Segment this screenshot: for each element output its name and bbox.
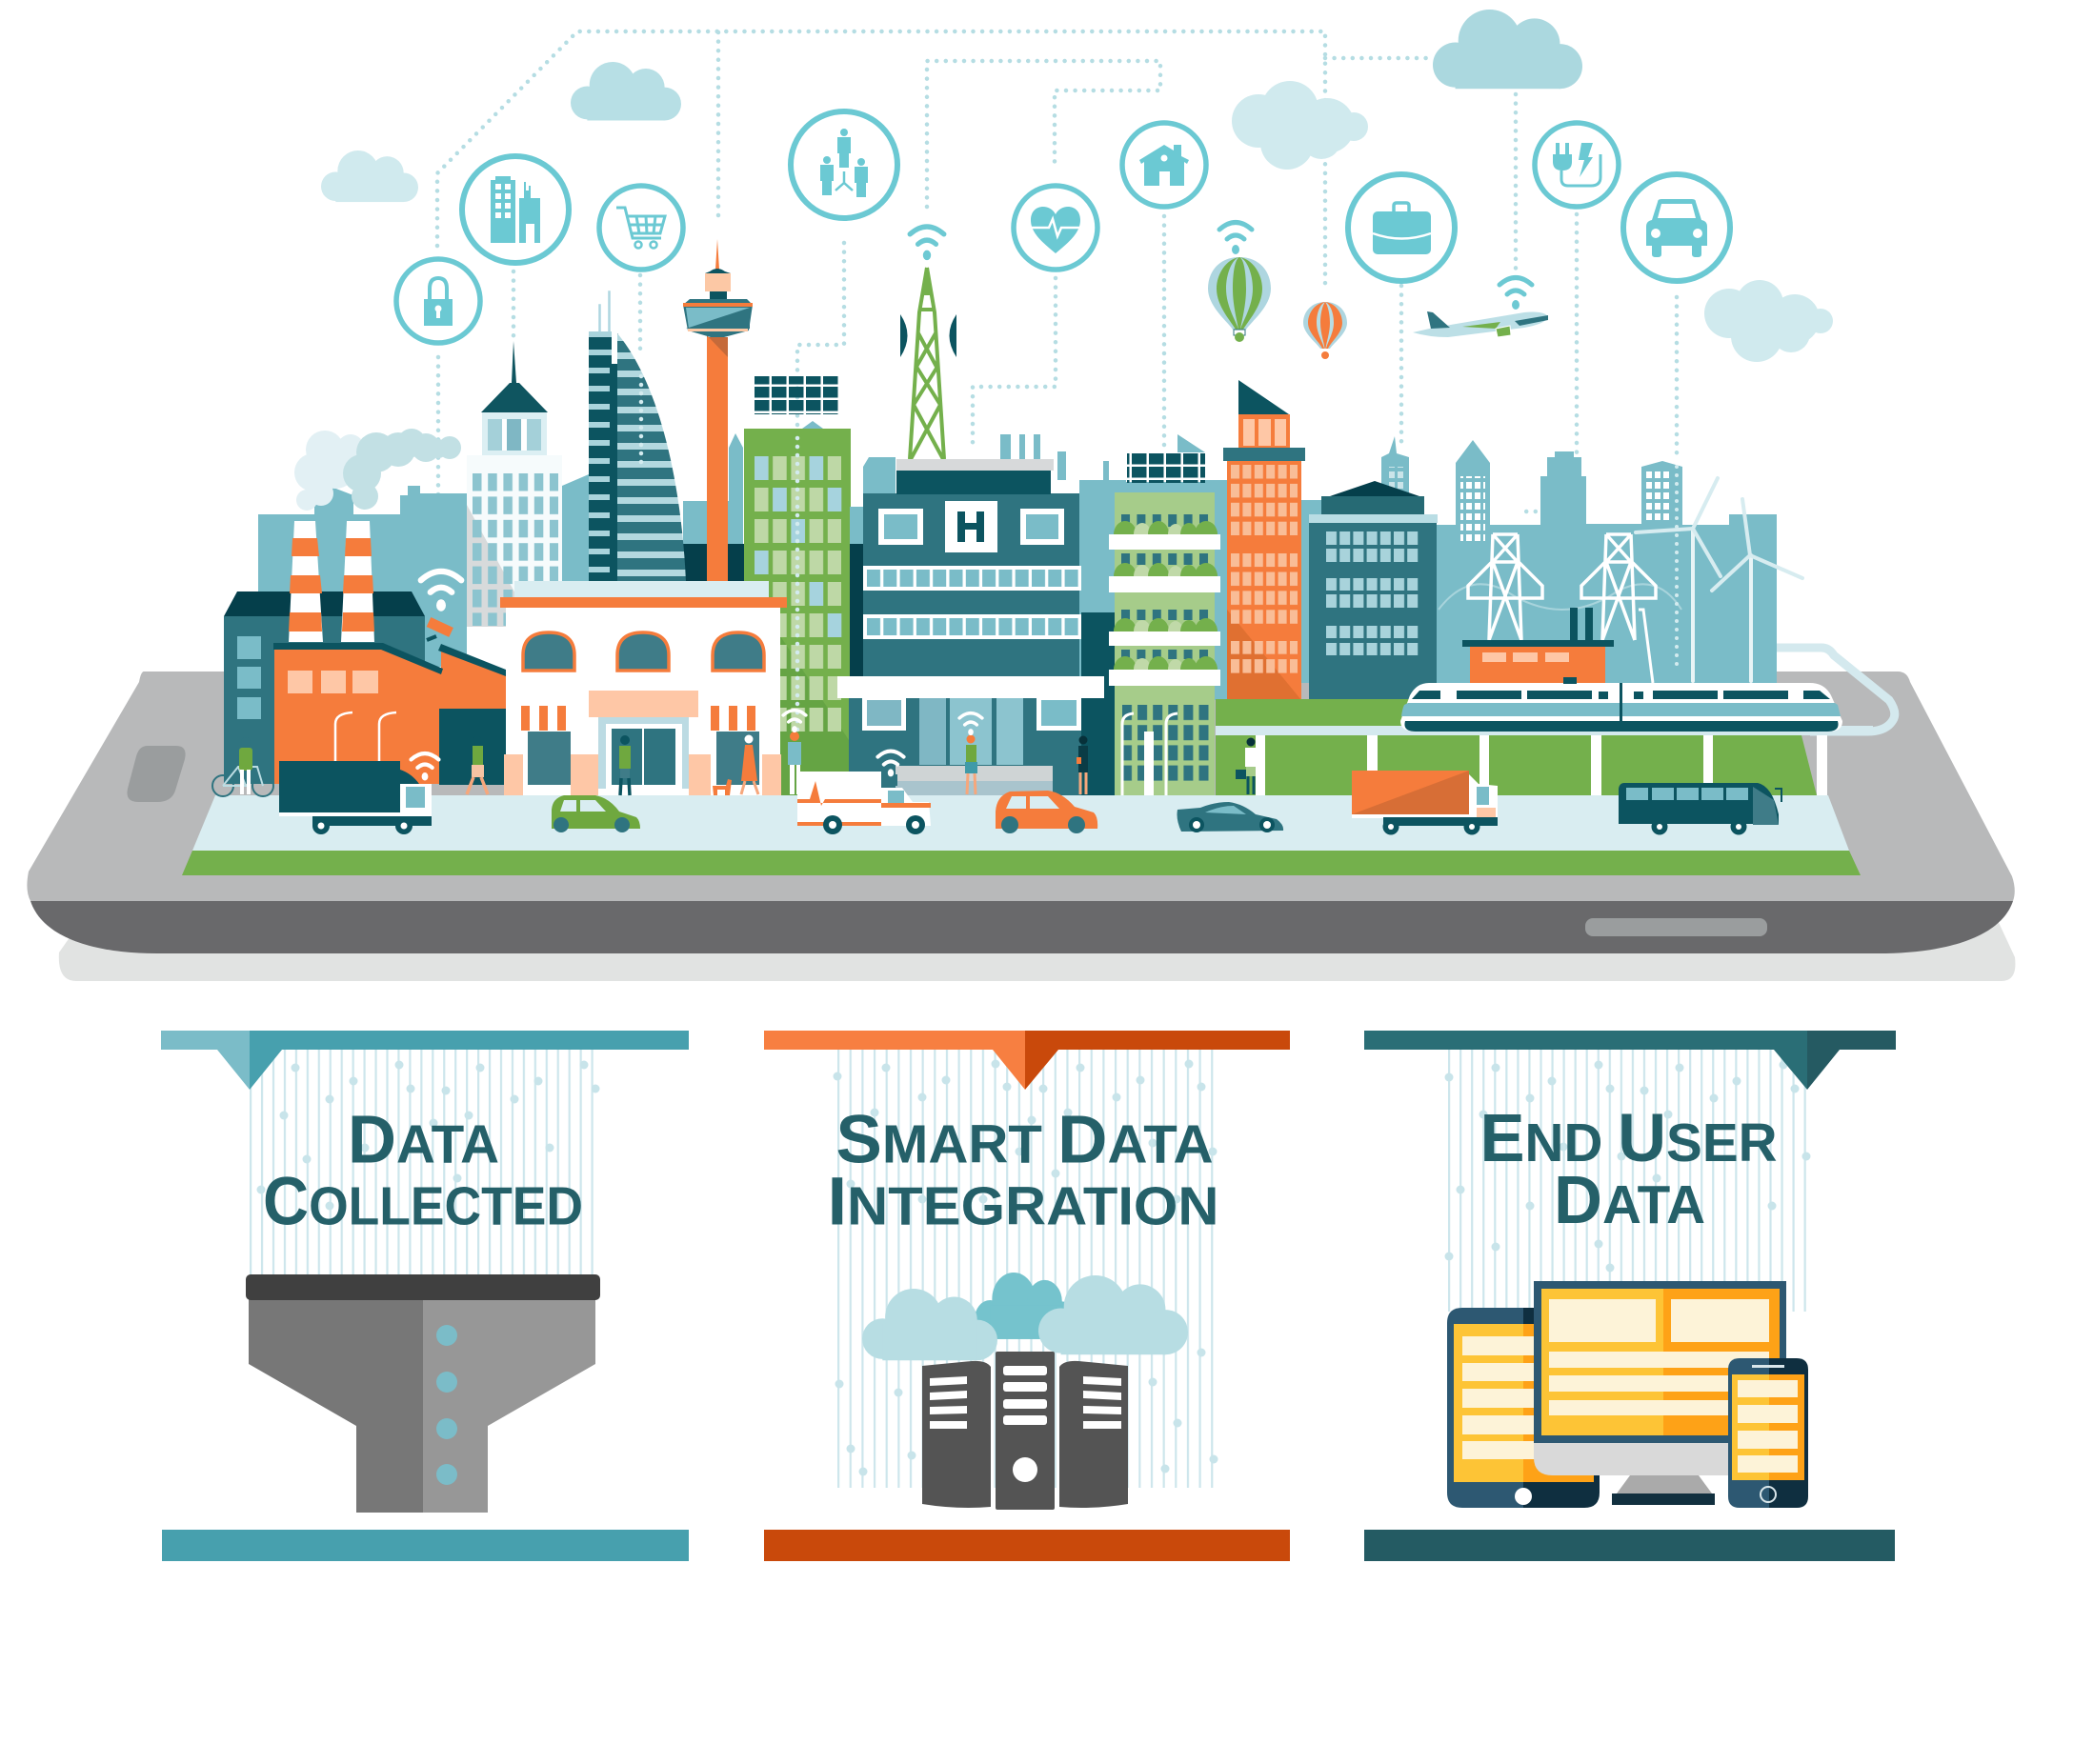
pedestrian dark dress <box>1077 735 1088 794</box>
hospital canopy <box>837 676 1104 698</box>
icon circle: shopping cart <box>599 186 683 270</box>
cloud large top right <box>1433 10 1582 89</box>
white tower <box>467 341 562 627</box>
wifi over factory <box>421 571 461 611</box>
delivery truck teal <box>279 761 432 834</box>
green verge <box>182 851 1861 875</box>
footer bar <box>764 1530 1290 1561</box>
wind turbine left <box>1636 478 1721 681</box>
server left <box>922 1361 991 1508</box>
heading: end user data: DATA <box>1554 1163 1705 1238</box>
data rain dots <box>257 1061 600 1210</box>
tablet device <box>27 672 2015 953</box>
wifi over pedestrian <box>783 711 806 732</box>
sail skyscraper <box>589 291 686 582</box>
ambulance <box>797 772 931 834</box>
pedestrian green and striped <box>467 735 488 794</box>
balcony building <box>1109 492 1220 795</box>
shop peach bases <box>504 754 781 795</box>
wifi over truck <box>412 753 438 781</box>
monitor stand <box>1612 1475 1715 1505</box>
icon circle: plug and power <box>1535 123 1619 207</box>
pedestrian with briefcase <box>1236 737 1257 794</box>
orange car <box>996 791 1097 833</box>
dark column left of hospital <box>850 544 863 677</box>
tablet side edge <box>30 901 2013 953</box>
skyline behind hospital <box>850 451 1229 700</box>
smoke plumes <box>294 429 461 511</box>
city illustration <box>182 239 1895 875</box>
server centre <box>996 1352 1055 1510</box>
heading: smart data integration <box>827 1103 1219 1240</box>
airplane <box>1413 311 1548 337</box>
track loop <box>1777 648 1895 732</box>
observation tower <box>683 239 753 582</box>
lawn under track with pillars <box>1216 735 1827 795</box>
green building <box>744 421 851 795</box>
tablet device <box>1447 1308 1600 1508</box>
bus <box>1619 783 1781 834</box>
elevated track <box>1216 726 1873 735</box>
skyline tower windows <box>1386 467 1670 545</box>
panel: data collected <box>161 1031 689 1561</box>
header bar with pointer <box>161 1031 689 1090</box>
left cloud <box>862 1289 997 1360</box>
pedestrian with dog <box>713 735 758 795</box>
train <box>1400 677 1842 732</box>
heading: end user data <box>1480 1101 1778 1238</box>
panel: smart data integration <box>764 1031 1290 1561</box>
hospital window strips <box>863 566 1081 639</box>
header bar with pointer <box>1364 1031 1896 1090</box>
solar panel on balcony building <box>1126 434 1205 483</box>
panel: end user data <box>1364 1031 1896 1561</box>
hospital entrance <box>862 698 1081 795</box>
shop arched windows <box>523 632 764 671</box>
small orange plant <box>1462 608 1614 684</box>
delivery truck orange <box>1352 771 1498 834</box>
security camera <box>427 617 453 640</box>
power pylon right <box>1581 534 1656 683</box>
pedestrian blue top <box>788 732 801 794</box>
icon: cloud servers <box>862 1273 1188 1510</box>
dark base behind towers <box>683 544 744 582</box>
orange factory <box>273 643 506 785</box>
orange tower <box>1223 380 1305 700</box>
cloud round right <box>1704 280 1833 362</box>
dotted network lines <box>437 31 1677 543</box>
street lamps <box>1122 713 1177 795</box>
footer bar <box>1364 1530 1895 1561</box>
smokestacks <box>289 521 374 642</box>
transmission mast <box>900 268 956 459</box>
wifi above plane <box>1499 278 1532 310</box>
header bar with pointer <box>764 1031 1290 1090</box>
shop sign <box>589 691 698 717</box>
shop awnings and side windows <box>521 706 766 785</box>
heading: end user data: END USER <box>1480 1101 1778 1176</box>
tablet camera slot <box>127 746 186 802</box>
right cloud <box>1038 1275 1188 1354</box>
icon circle: people network <box>791 111 897 218</box>
heading: data collected <box>263 1103 583 1240</box>
heading: data collected: DATA <box>348 1103 499 1177</box>
shop building <box>500 581 787 795</box>
icon circle: buildings <box>462 156 569 263</box>
back block between towers <box>562 474 589 610</box>
tablet shadow <box>59 914 2015 981</box>
network dots on skyline <box>1675 467 1679 667</box>
icon circle: car <box>1623 174 1730 281</box>
heading: smart data integration: INTEGRATION <box>827 1164 1219 1240</box>
road <box>192 795 1849 851</box>
wind turbine right <box>1712 499 1802 681</box>
solar panel on green building <box>754 376 838 414</box>
cyclist <box>212 737 273 796</box>
heading: smart data integration: SMART DATA <box>836 1103 1214 1177</box>
tablet home button <box>1585 918 1767 936</box>
icon circle: house <box>1122 123 1206 207</box>
background skyline left <box>258 486 467 667</box>
hospital <box>837 459 1116 795</box>
icon circle: briefcase <box>1348 174 1455 281</box>
wifi above mast <box>910 227 944 260</box>
lawn strip by track <box>1216 699 1410 728</box>
data rain lines <box>1448 1050 1808 1312</box>
power pylon left <box>1468 534 1542 640</box>
cloud top centre <box>571 62 681 120</box>
green car <box>552 795 640 832</box>
pedestrian by hospital <box>965 735 977 794</box>
back blocks by observation tower <box>683 433 743 544</box>
smartphone <box>1728 1358 1808 1508</box>
data rain lines <box>837 1050 1215 1488</box>
heading: data collected: COLLECTED <box>263 1164 583 1240</box>
server right <box>1059 1361 1128 1508</box>
green hot-air balloon <box>1208 257 1271 342</box>
skyline blocks behind hospital roof <box>1000 434 1040 459</box>
icon: responsive devices <box>1447 1281 1808 1508</box>
skyline behind office <box>1301 436 1777 683</box>
teal coupe <box>1177 802 1283 832</box>
middle cloud <box>975 1273 1077 1339</box>
shop door <box>598 717 689 789</box>
hospital windows <box>878 509 1064 545</box>
orange hot-air balloon <box>1303 302 1347 359</box>
icon circle: padlock <box>396 259 480 343</box>
wifi over ambulance <box>877 752 904 776</box>
wifi over hospital pedestrian <box>959 713 982 735</box>
icon: funnel <box>246 1274 600 1513</box>
network dots on green building <box>641 376 797 733</box>
pedestrian at door <box>619 735 631 795</box>
cloud round middle <box>1232 81 1368 170</box>
power line cables <box>1439 584 1681 610</box>
data rain lines <box>250 1050 597 1276</box>
icon circle: heart <box>1014 186 1097 270</box>
factory back block <box>224 591 425 784</box>
data rain dots <box>833 1059 1218 1476</box>
office building <box>1309 481 1438 700</box>
data rain dots <box>1444 1061 1810 1273</box>
tablet body top face <box>27 672 2015 901</box>
hospital H sign <box>945 501 997 552</box>
footer bar <box>162 1530 689 1561</box>
wifi above green balloon <box>1219 223 1252 254</box>
desktop monitor <box>1534 1281 1786 1475</box>
cloud small left <box>321 150 418 202</box>
